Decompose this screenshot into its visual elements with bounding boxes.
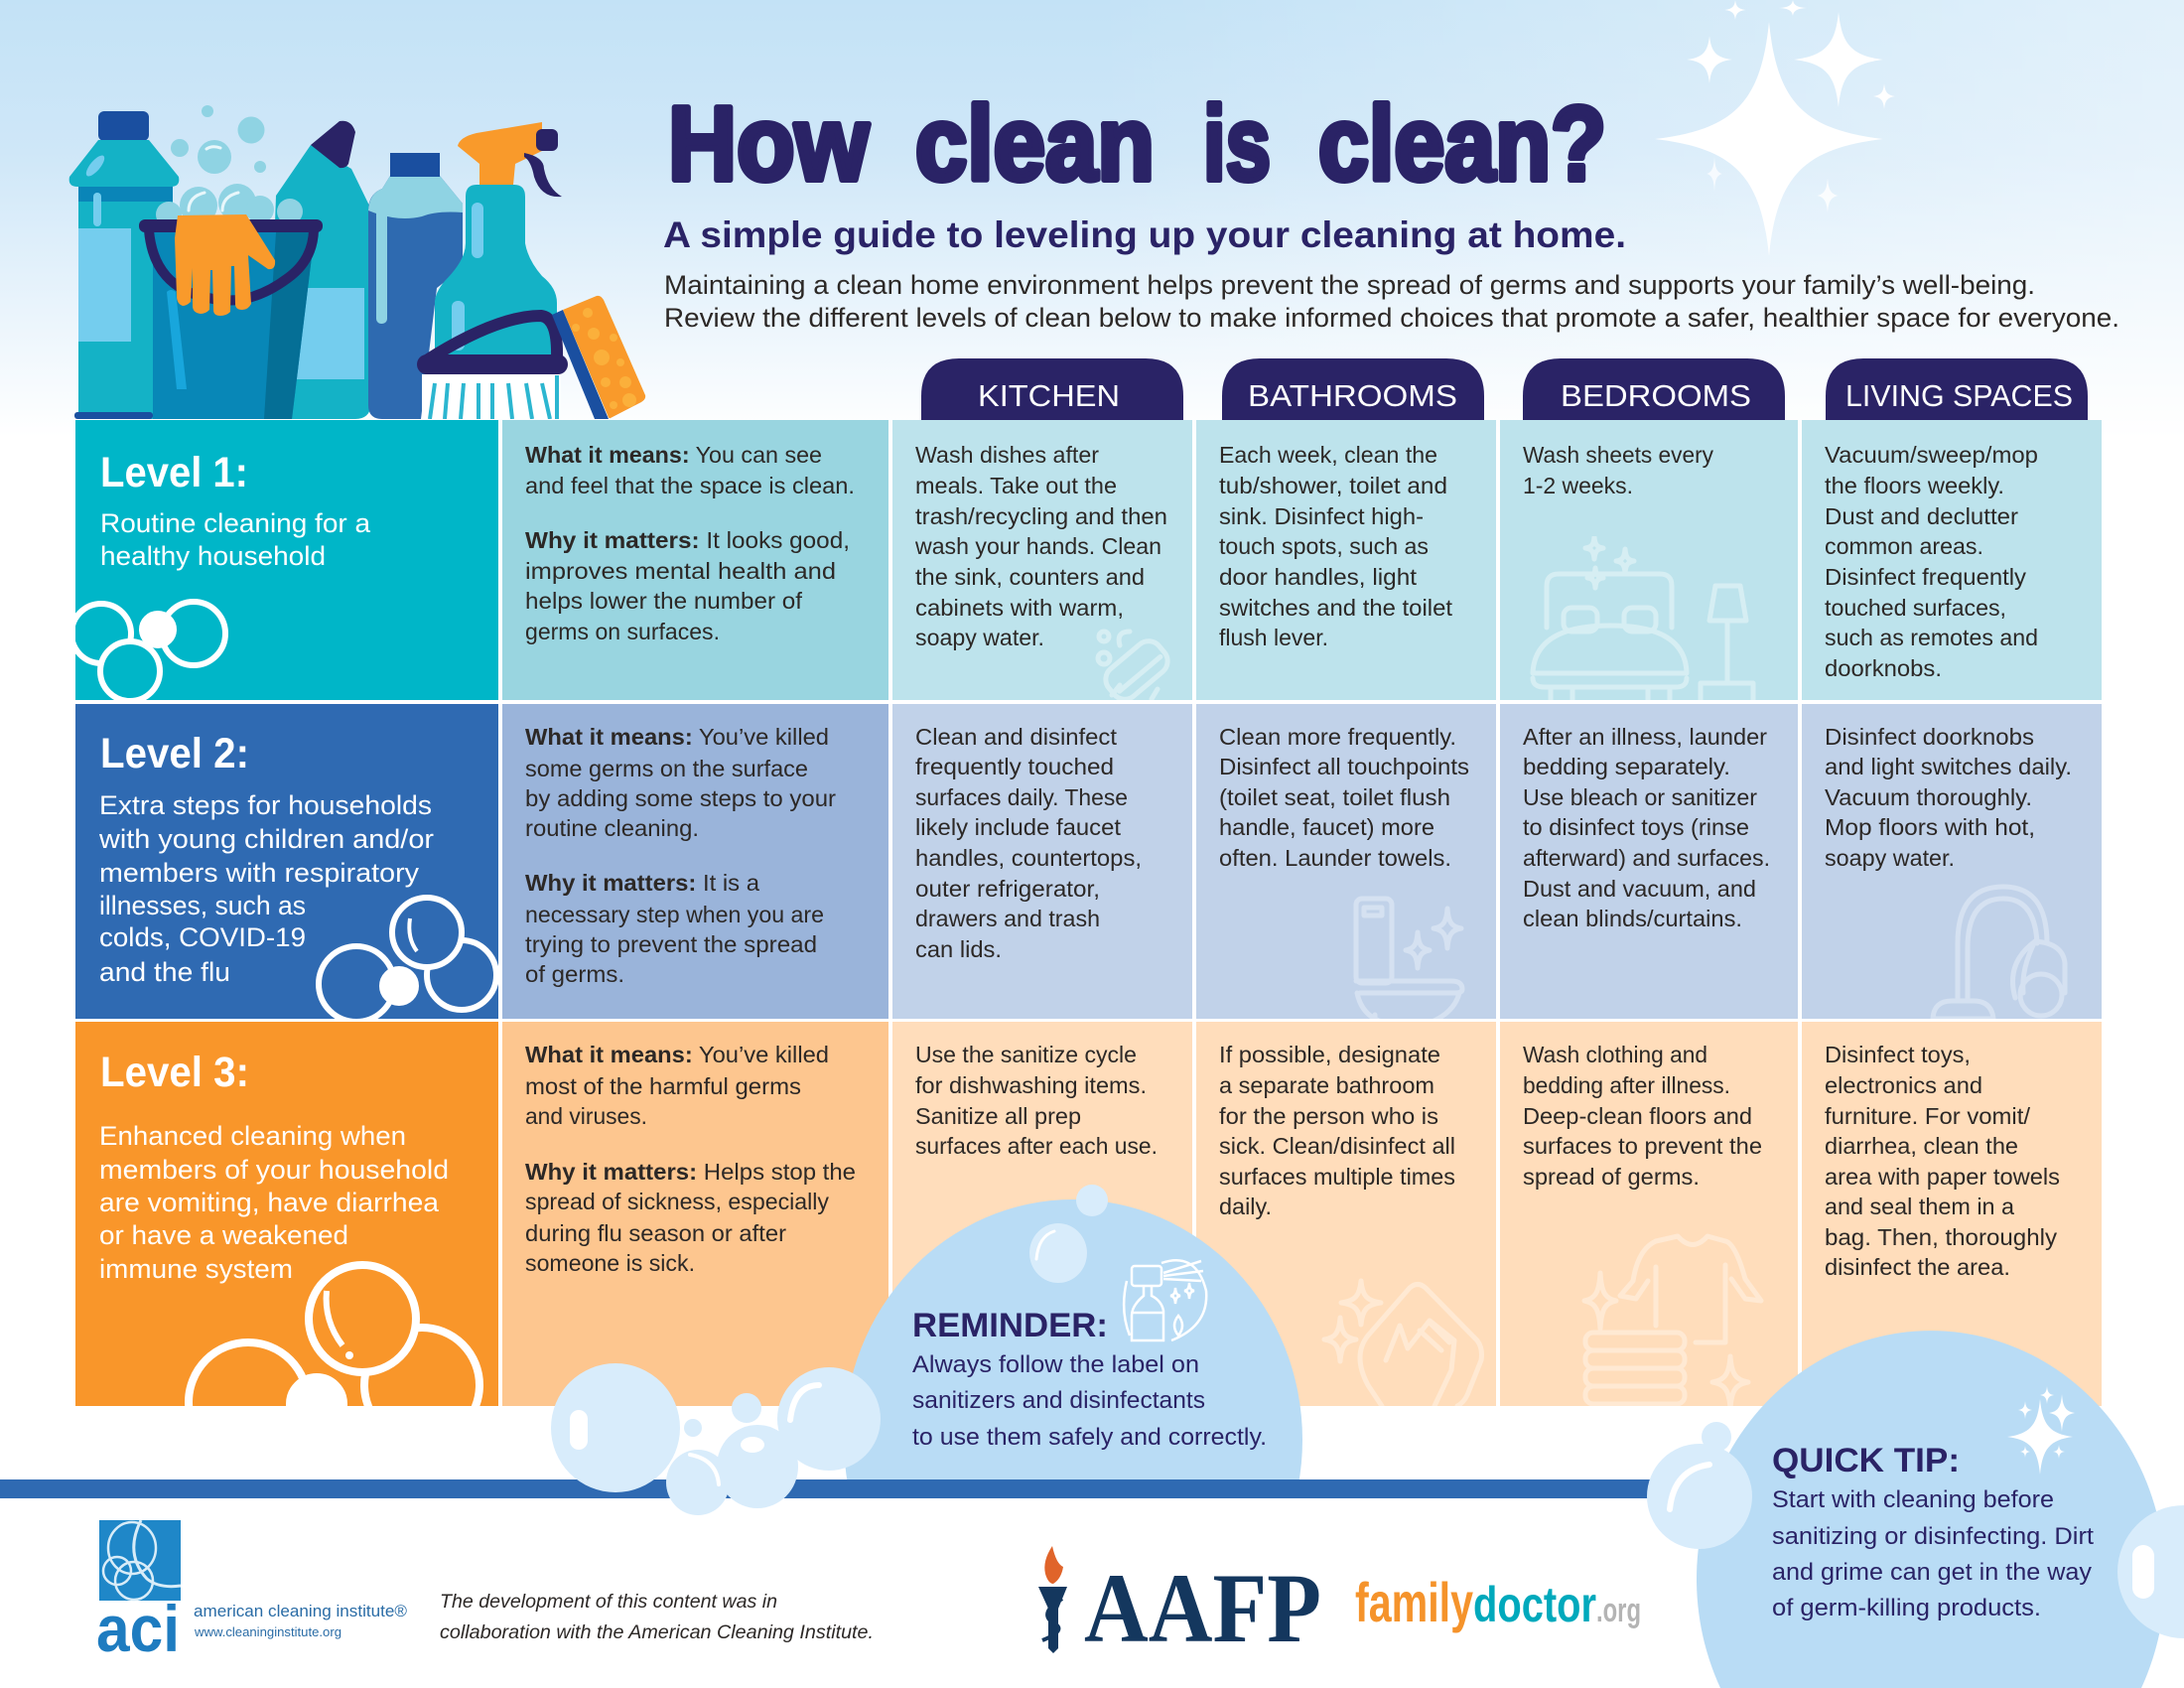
panel: level 1 living spaces: doorknobs. bbox=[1825, 655, 1942, 681]
panel: level 2 kitchen bbox=[892, 704, 1192, 1019]
panel: level 3 label: are vomiting, have diarrhea bbox=[99, 1188, 440, 1217]
panel: level 1 bathrooms: flush lever. bbox=[1219, 625, 1328, 650]
tab: living spaces: LIVING SPACES bbox=[1845, 378, 2073, 413]
panel: level 2 label: illnesses, such as bbox=[99, 891, 306, 920]
panel: level 3 kitchen: for dishwashing items. bbox=[915, 1072, 1147, 1098]
panel: level 3 bathrooms: for the person who is bbox=[1219, 1103, 1438, 1129]
panel: level 3 meaning: most of the harmful germs bbox=[525, 1073, 801, 1099]
panel: level 3 label: members of your household bbox=[99, 1155, 449, 1185]
quick tip text bbox=[1772, 1486, 2094, 1621]
logo: familydoctor.org bbox=[1355, 1571, 1641, 1633]
panel: level 2 meaning: some germs on the surface bbox=[525, 756, 808, 781]
panel: level 1 bedrooms bbox=[1500, 420, 1798, 703]
panel: level 1 kitchen: cabinets with warm, bbox=[915, 595, 1124, 621]
panel: level 2 bedrooms: clean blinds/curtains. bbox=[1523, 906, 1742, 931]
logo: AAFP: AAFP bbox=[1084, 1553, 1321, 1663]
icon: sponge bbox=[552, 296, 645, 419]
panel: level 2 bathrooms: Clean more frequently. bbox=[1219, 724, 1456, 750]
panel: level 2 label: members with respiratory bbox=[99, 858, 420, 888]
icon: spray bottle bbox=[1124, 1260, 1206, 1340]
panel: level 3 living spaces bbox=[1802, 1022, 2102, 1406]
panel: level 2 living spaces: Mop floors with hot, bbox=[1825, 814, 2035, 840]
panel: level 1 living spaces: touched surfaces, bbox=[1825, 595, 2006, 621]
panel: level 2 meaning: necessary step when you are bbox=[525, 902, 824, 927]
panel: level 3 living spaces: disinfect the area. bbox=[1825, 1254, 2010, 1280]
panel: level 3 bedrooms: spread of germs. bbox=[1523, 1164, 1700, 1190]
panel: level 2 meaning: by adding some steps to your bbox=[525, 785, 836, 811]
panel: level 1 meaning: germs on surfaces. bbox=[525, 619, 720, 644]
panel: level 2 bedrooms: afterward) and surfaces. bbox=[1523, 845, 1770, 871]
panel: level 3 bedrooms bbox=[1500, 1022, 1798, 1408]
icon: blue bottle bbox=[368, 153, 463, 419]
panel: level 2 living spaces: Vacuum thoroughly. bbox=[1825, 784, 2032, 810]
panel: level 1 meaning: What it means: You can see bbox=[525, 442, 822, 468]
heading: quick tip: QUICK TIP: bbox=[1772, 1442, 1960, 1479]
panel: level 1 kitchen: the sink, counters and bbox=[915, 564, 1145, 590]
icon: foam and soap bubbles bbox=[156, 105, 303, 227]
panel: level 2 kitchen: Clean and disinfect bbox=[915, 724, 1118, 750]
panel: level 2 label: Level 2: bbox=[100, 730, 249, 777]
icon: hand wiping with cloth bbox=[1324, 1281, 1481, 1406]
collaboration note: The development of this content was in bbox=[440, 1591, 777, 1613]
intro text: Review the different levels of clean below to make informed choices that promote a safer, healthier space for everyone. bbox=[664, 303, 2119, 333]
panel: level 3 living spaces: bag. Then, thoroughly bbox=[1825, 1224, 2058, 1250]
tab: kitchen bbox=[921, 358, 1183, 420]
panel: level 3 bathrooms: daily. bbox=[1219, 1194, 1272, 1219]
logo: familydoctor.org: .org bbox=[1596, 1592, 1641, 1629]
panel: level 2 kitchen: frequently touched bbox=[915, 754, 1114, 779]
panel: level 2 bedrooms bbox=[1500, 704, 1798, 1019]
panel: level 3 label bbox=[75, 1022, 498, 1406]
panel: level 1 meaning bbox=[502, 420, 888, 700]
reminder text: sanitizers and disinfectants bbox=[912, 1387, 1205, 1414]
panel: level 3 label: or have a weakened bbox=[99, 1220, 348, 1250]
panel: level 1 bathrooms: tub/shower, toilet and bbox=[1219, 473, 1447, 498]
subtitle: A simple guide to leveling up your cleaning at home. bbox=[663, 214, 1626, 255]
collaboration note bbox=[440, 1591, 874, 1643]
callout: reminder bbox=[846, 1185, 1302, 1479]
panel: level 3 kitchen: surfaces after each use. bbox=[915, 1133, 1158, 1159]
panel: level 3 meaning: Why it matters: Helps stop the bbox=[525, 1159, 856, 1185]
panel: level 3 bedrooms: bedding after illness. bbox=[1523, 1072, 1730, 1098]
panel: level 1 bedrooms: 1-2 weeks. bbox=[1523, 473, 1633, 498]
panel: level 1 label: Routine cleaning for a bbox=[100, 508, 371, 538]
panel: level 3 label: Level 3: bbox=[100, 1049, 249, 1096]
panel: level 2 label bbox=[75, 704, 498, 1022]
panel: level 1 living spaces: common areas. bbox=[1825, 533, 1983, 559]
background gradient bbox=[0, 0, 2184, 437]
panel: level 2 meaning: What it means: You’ve killed bbox=[525, 724, 829, 750]
icon: angled teal bottle bbox=[268, 121, 371, 419]
panel: level 1 bathrooms: Each week, clean the bbox=[1219, 442, 1437, 468]
panel: level 3 living spaces: electronics and bbox=[1825, 1072, 1982, 1098]
logo: american cleaning institute bbox=[96, 1520, 407, 1665]
panel: level 2 bathrooms: handle, faucet) more bbox=[1219, 814, 1434, 840]
panel: level 1 living spaces: Vacuum/sweep/mop bbox=[1825, 442, 2038, 468]
panel: level 2 meaning: Why it matters: It is a bbox=[525, 870, 759, 896]
panel: level 2 kitchen: drawers and trash bbox=[915, 906, 1100, 931]
panel: level 1 label: Level 1: bbox=[100, 449, 248, 496]
tab: living spaces bbox=[1826, 358, 2088, 420]
title: clean bbox=[915, 85, 1155, 203]
panel: level 3 kitchen bbox=[892, 1022, 1192, 1406]
panel: level 1 meaning: improves mental health and bbox=[525, 558, 836, 584]
panel: level 3 meaning: spread of sickness, especially bbox=[525, 1189, 829, 1214]
panel: level 2 living spaces: soapy water. bbox=[1825, 845, 1955, 871]
quick tip text: Start with cleaning before bbox=[1772, 1486, 2054, 1513]
panel: level 2 meaning: of germs. bbox=[525, 961, 624, 987]
panel: level 3 kitchen: Sanitize all prep bbox=[915, 1103, 1081, 1129]
icon: orange glove bbox=[175, 214, 275, 316]
panel: level 2 label: colds, COVID-19 bbox=[99, 922, 306, 952]
row: level 1 bbox=[71, 420, 2102, 705]
panel: level 2 label: and the flu bbox=[99, 957, 230, 987]
panel: level 1 meaning: and feel that the space is clean. bbox=[525, 473, 855, 498]
icon: scrub brush bbox=[417, 316, 568, 419]
panel: level 3 living spaces: Disinfect toys, bbox=[1825, 1042, 1971, 1067]
icon: tall teal bottle bbox=[69, 111, 179, 419]
tab: kitchen: KITCHEN bbox=[978, 378, 1120, 413]
panel: level 3 living spaces: diarrhea, clean the bbox=[1825, 1133, 2018, 1159]
panel: level 3 bathrooms: a separate bathroom bbox=[1219, 1072, 1434, 1098]
panel: level 2 living spaces: and light switches daily. bbox=[1825, 754, 2072, 779]
icon: bed and lamp bbox=[1533, 537, 1753, 703]
icon: toilet bbox=[1356, 899, 1462, 1023]
panel: level 2 kitchen: likely include faucet bbox=[915, 814, 1122, 840]
title bbox=[668, 85, 1606, 203]
panel: level 2 label: with young children and/or bbox=[98, 824, 434, 854]
panel: level 1 kitchen: Wash dishes after bbox=[915, 442, 1099, 468]
column tabs bbox=[921, 358, 2088, 420]
icon: vacuum cleaner bbox=[1933, 887, 2065, 1019]
reminder text: Always follow the label on bbox=[912, 1351, 1199, 1378]
panel: level 1 living spaces: Dust and declutter bbox=[1825, 503, 2018, 529]
panel: level 1 bedrooms: Wash sheets every bbox=[1523, 442, 1713, 468]
panel: level 3 bathrooms: sick. Clean/disinfect all bbox=[1219, 1133, 1455, 1159]
panel: level 1 bathrooms: switches and the toilet bbox=[1219, 595, 1453, 621]
title: How bbox=[668, 85, 869, 203]
icon: sponge with suds bbox=[1098, 632, 1173, 705]
icon: spray bottle bbox=[435, 122, 562, 354]
tab: bathrooms: BATHROOMS bbox=[1248, 378, 1457, 413]
panel: level 3 meaning: during flu season or after bbox=[525, 1220, 786, 1246]
panel: level 3 bathrooms: If possible, designate bbox=[1219, 1042, 1440, 1067]
decoration: soap bubbles bbox=[551, 1363, 881, 1515]
tab: bathrooms bbox=[1222, 358, 1484, 420]
row: level 3 bbox=[75, 1022, 2102, 1406]
panel: level 1 kitchen: wash your hands. Clean bbox=[914, 533, 1161, 559]
panel: level 2 meaning: routine cleaning. bbox=[525, 815, 699, 841]
panel: level 3 bedrooms: surfaces to prevent the bbox=[1523, 1133, 1762, 1159]
panel: level 1 living spaces: Disinfect frequently bbox=[1825, 564, 2027, 590]
panel: level 1 meaning: helps lower the number of bbox=[525, 588, 803, 614]
panel: level 1 kitchen: meals. Take out the bbox=[915, 473, 1117, 498]
panel: level 2 bathrooms: Disinfect all touchpoints bbox=[1219, 754, 1469, 779]
title: clean? bbox=[1318, 85, 1606, 203]
panel: level 3 living spaces: and seal them in a bbox=[1825, 1194, 2014, 1219]
intro text: Maintaining a clean home environment helps prevent the spread of germs and supports your family’s well-being. bbox=[664, 270, 2035, 300]
reminder text bbox=[912, 1351, 1267, 1451]
panel: level 2 kitchen: outer refrigerator, bbox=[915, 876, 1100, 902]
quick tip text: sanitizing or disinfecting. Dirt bbox=[1772, 1523, 2094, 1550]
panel: level 1 bathrooms: door handles, light bbox=[1219, 564, 1418, 590]
panel: level 3 meaning: someone is sick. bbox=[525, 1250, 695, 1276]
collaboration note: collaboration with the American Cleaning Institute. bbox=[440, 1621, 874, 1643]
panel: level 1 living spaces: the floors weekly. bbox=[1825, 473, 2004, 498]
panel: level 1 label bbox=[71, 420, 498, 701]
panel: level 2 meaning: trying to prevent the spread bbox=[525, 931, 817, 957]
panel: level 2 living spaces: Disinfect doorknobs bbox=[1825, 724, 2034, 750]
illustration: cleaning supplies bbox=[69, 105, 645, 419]
callout: quick tip bbox=[1647, 1331, 2184, 1688]
panel: level 3 meaning: and viruses. bbox=[525, 1103, 647, 1129]
panel: level 2 bedrooms: Use bleach or sanitizer bbox=[1523, 784, 1757, 810]
panel: level 3 living spaces: area with paper towels bbox=[1825, 1164, 2060, 1190]
panel: level 3 bedrooms: Deep-clean floors and bbox=[1523, 1103, 1752, 1129]
panel: level 1 label: healthy household bbox=[100, 541, 326, 571]
panel: level 3 kitchen: Use the sanitize cycle bbox=[915, 1042, 1137, 1067]
panel: level 2 meaning bbox=[502, 704, 888, 1019]
panel: level 1 living spaces: such as remotes and bbox=[1825, 625, 2038, 650]
panel: level 1 kitchen bbox=[892, 420, 1192, 705]
row: level 2 bbox=[75, 704, 2102, 1023]
panel: level 2 bathrooms bbox=[1196, 704, 1496, 1023]
panel: level 2 kitchen: surfaces daily. These bbox=[915, 784, 1128, 810]
logo: american cleaning institute: american cleaning institute® bbox=[194, 1602, 407, 1620]
panel: level 3 meaning bbox=[502, 1022, 888, 1406]
panel: level 1 kitchen: soapy water. bbox=[915, 625, 1044, 650]
panel: level 1 bathrooms: sink. Disinfect high- bbox=[1219, 503, 1424, 529]
icon: bucket bbox=[139, 219, 323, 419]
panel: level 3 living spaces: furniture. For vomit/ bbox=[1825, 1103, 2031, 1129]
panel: level 1 meaning: Why it matters: It looks good, bbox=[525, 527, 850, 553]
panel: level 3 label: Enhanced cleaning when bbox=[99, 1121, 406, 1151]
logo: american cleaning institute: aci bbox=[96, 1592, 180, 1665]
icon: shirt and folded clothes bbox=[1584, 1236, 1761, 1408]
logo: familydoctor.org: doctor bbox=[1473, 1577, 1596, 1632]
panel: level 1 bathrooms bbox=[1196, 420, 1496, 700]
panel: level 3 bathrooms bbox=[1196, 1022, 1496, 1406]
logo: american cleaning institute: www.cleaninginstitute.org bbox=[194, 1624, 341, 1639]
icon: sparkles bbox=[2007, 1386, 2075, 1475]
panel: level 3 bathrooms: surfaces multiple times bbox=[1219, 1164, 1455, 1190]
panel: level 3 meaning: What it means: You’ve killed bbox=[525, 1042, 829, 1067]
panel: level 3 label: immune system bbox=[99, 1254, 293, 1284]
intro text bbox=[664, 270, 2119, 333]
heading: reminder: REMINDER: bbox=[912, 1307, 1108, 1344]
quick tip text: and grime can get in the way bbox=[1772, 1559, 2092, 1586]
quick tip text: of germ-killing products. bbox=[1772, 1595, 2041, 1621]
panel: level 2 bedrooms: bedding separately. bbox=[1523, 754, 1730, 779]
panel: level 2 kitchen: handles, countertops, bbox=[915, 845, 1142, 871]
panel: level 2 bedrooms: to disinfect toys (rinse bbox=[1523, 814, 1749, 840]
panel: level 1 kitchen: trash/recycling and then bbox=[915, 503, 1167, 529]
panel: level 2 bathrooms: (toilet seat, toilet flush bbox=[1219, 784, 1450, 810]
reminder text: to use them safely and correctly. bbox=[912, 1424, 1267, 1451]
panel: level 1 living spaces bbox=[1802, 420, 2102, 700]
logo: familydoctor.org: family bbox=[1355, 1571, 1473, 1633]
footer band bbox=[0, 1479, 1650, 1498]
panel: level 2 living spaces bbox=[1802, 704, 2102, 1019]
sparkle decoration bbox=[1655, 0, 1895, 256]
panel: level 3 bedrooms: Wash clothing and bbox=[1523, 1042, 1707, 1067]
panel: level 1 bathrooms: touch spots, such as bbox=[1219, 533, 1429, 559]
panel: level 2 bedrooms: Dust and vacuum, and bbox=[1523, 876, 1756, 902]
panel: level 2 bedrooms: After an illness, launder bbox=[1523, 724, 1767, 750]
panel: level 2 label: Extra steps for households bbox=[99, 790, 432, 820]
tab: bedrooms bbox=[1523, 358, 1785, 420]
panel: level 2 kitchen: can lids. bbox=[915, 936, 1002, 962]
panel: level 2 bathrooms: often. Launder towels. bbox=[1219, 845, 1451, 871]
tab: bedrooms: BEDROOMS bbox=[1561, 378, 1751, 413]
title: is bbox=[1203, 85, 1271, 203]
